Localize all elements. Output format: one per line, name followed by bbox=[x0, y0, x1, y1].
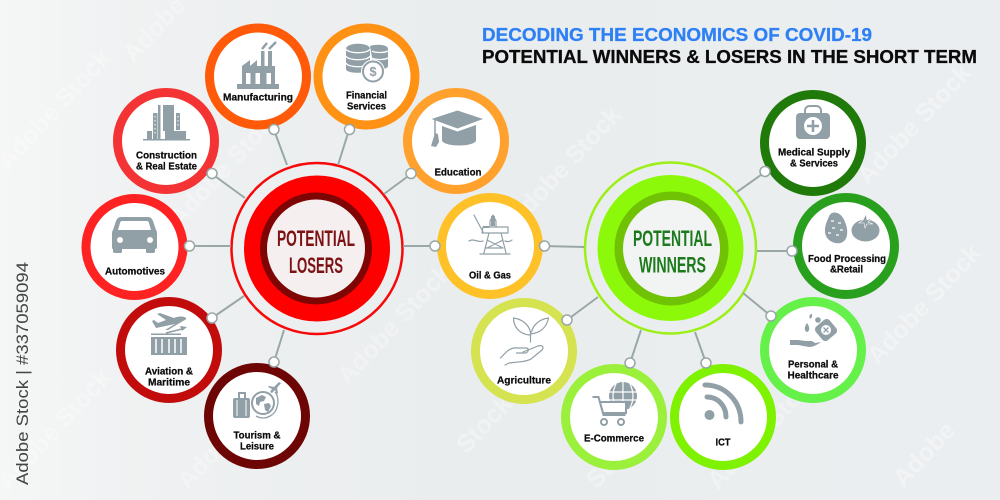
panel: education: Education bbox=[434, 168, 482, 178]
panel: potential losers hub: LOSERS bbox=[289, 253, 343, 278]
title: POTENTIAL WINNERS & LOSERS IN THE SHORT TERM bbox=[482, 47, 977, 67]
watermarks: Adobe bbox=[887, 416, 961, 493]
connectors: losers bbox=[184, 124, 440, 367]
icon: medical case bbox=[796, 106, 830, 139]
panel: food processing and retail bbox=[798, 198, 894, 294]
watermarks: Adobe Stock bbox=[332, 259, 457, 390]
panel: tourism and leisure: Leisure bbox=[240, 442, 274, 452]
watermarks: Adobe Stock bbox=[172, 364, 297, 495]
panel: medical supply bbox=[764, 94, 862, 192]
icon: sanitizer and hand bbox=[790, 314, 839, 347]
panel: tourism and leisure bbox=[208, 368, 306, 464]
panel: automotives: Automotives bbox=[105, 266, 165, 278]
panel: personal and healthcare bbox=[764, 302, 862, 398]
panel: financial services: Services bbox=[347, 102, 386, 112]
watermarks: Adobe Stock bbox=[164, 101, 289, 232]
panel: education bbox=[408, 92, 504, 190]
icon: factory bbox=[237, 42, 279, 89]
panel: manufacturing: Manufacturing bbox=[223, 92, 293, 104]
panel: automotives bbox=[86, 198, 183, 296]
icon: suitcase and globe bbox=[233, 382, 281, 418]
panel: construction bbox=[118, 92, 214, 190]
panel: medical supply: & Services bbox=[790, 158, 838, 170]
watermarks: Adobe Stock bbox=[862, 239, 987, 370]
watermarks: Stock bbox=[581, 425, 648, 494]
panel: manufacturing bbox=[210, 28, 306, 125]
panel: personal and healthcare: Personal & bbox=[788, 360, 838, 370]
panel: e-commerce: E-Commerce bbox=[584, 434, 644, 444]
panel: e-commerce bbox=[566, 368, 662, 466]
panel: potential winners hub bbox=[585, 162, 756, 334]
watermarks: Adobe Stock bbox=[852, 59, 977, 190]
panel: tourism and leisure: Tourism & bbox=[234, 430, 280, 442]
title bbox=[482, 25, 977, 67]
connectors: winners bbox=[540, 166, 797, 368]
panel: aviation and maritime: Aviation & bbox=[145, 366, 193, 378]
panel: construction: Construction bbox=[136, 150, 197, 162]
watermarks: Stock bbox=[451, 390, 518, 459]
panel: potential losers hub bbox=[232, 163, 402, 334]
panel: aviation and maritime bbox=[120, 302, 218, 398]
icon: graduation cap bbox=[431, 110, 483, 147]
panel: potential winners hub: POTENTIAL bbox=[633, 226, 712, 251]
icon: coins: $ bbox=[369, 64, 377, 79]
icon: plane and container bbox=[151, 313, 187, 355]
panel: oil and gas: Oil & Gas bbox=[469, 270, 511, 282]
stock credit: Adobe Stock | #337059094 bbox=[13, 262, 32, 485]
panel: financial services bbox=[318, 28, 415, 125]
panel: oil and gas bbox=[442, 198, 538, 294]
title: DECODING THE ECONOMICS OF COVID-19 bbox=[482, 25, 872, 45]
icon: car bbox=[112, 217, 157, 253]
panel: ict: ICT bbox=[716, 438, 730, 448]
icon: hand and sprout bbox=[500, 318, 548, 365]
watermarks: Adobe Stock bbox=[502, 101, 627, 232]
panel: potential winners hub: WINNERS bbox=[639, 252, 706, 278]
icon: buildings bbox=[143, 105, 190, 140]
panel: agriculture bbox=[476, 302, 572, 400]
panel: personal and healthcare: Healthcare bbox=[788, 370, 839, 382]
icon: cart and globe bbox=[592, 382, 637, 425]
icon: oil rig bbox=[469, 215, 512, 254]
icon: potato and tomato bbox=[825, 213, 880, 243]
panel: food processing and retail: Food Processing bbox=[808, 254, 886, 265]
panel: ict bbox=[674, 368, 772, 466]
panel: aviation and maritime: Maritime bbox=[148, 378, 190, 388]
panel: medical supply: Medical Supply bbox=[778, 148, 850, 158]
icon: signal bbox=[704, 385, 741, 422]
panel: construction: & Real Estate bbox=[136, 162, 197, 172]
panel: food processing and retail: &Retail bbox=[830, 264, 863, 276]
panel: agriculture: Agriculture bbox=[497, 376, 551, 386]
watermarks: Adobe Stock bbox=[702, 364, 827, 495]
panel: financial services: Financial bbox=[346, 90, 387, 102]
panel: potential losers hub: POTENTIAL bbox=[277, 226, 355, 251]
